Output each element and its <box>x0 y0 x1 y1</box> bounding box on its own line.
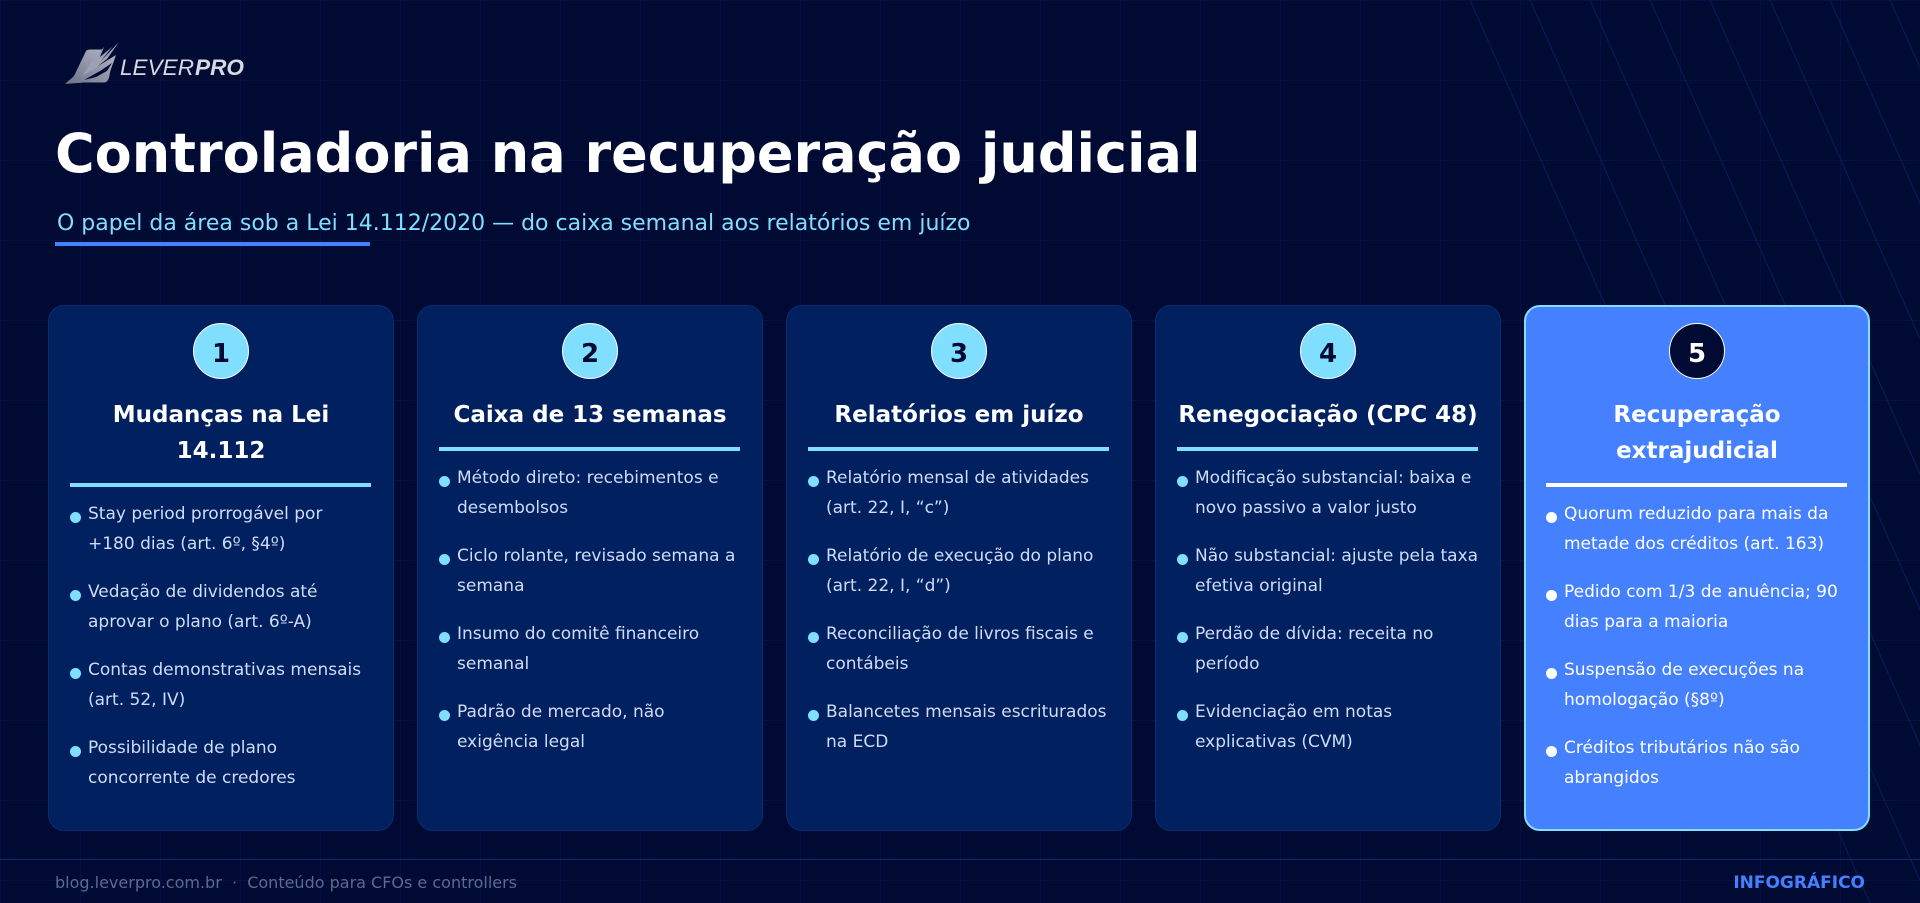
number badge 5: 5 <box>1688 339 1706 369</box>
wordmark: LEVER <box>120 55 194 80</box>
card 5 heading: extrajudicial <box>1616 438 1778 464</box>
bullet 3.3 <box>826 624 1094 674</box>
bullet 2.4: Padrão de mercado, não <box>457 702 665 722</box>
bullet 2.2 <box>457 546 735 596</box>
bullet 1.3: Contas demonstrativas mensais <box>88 660 361 680</box>
bullet 3.1: Relatório mensal de atividades <box>826 468 1089 488</box>
bullet 4.2: efetiva original <box>1195 576 1323 596</box>
number badge 1 <box>193 323 249 379</box>
bullet 5.3 <box>1564 660 1804 710</box>
bullet 2.3 <box>457 624 699 674</box>
bullet 3.4: Balancetes mensais escriturados <box>826 702 1107 722</box>
panel: card 1 <box>48 305 394 831</box>
bullet 5.2: Pedido com 1/3 de anuência; 90 <box>1564 582 1838 602</box>
card 1 heading: Mudanças na Lei <box>113 402 329 428</box>
bullet 3.2: Relatório de execução do plano <box>826 546 1093 566</box>
card 1 heading: 14.112 <box>177 438 265 464</box>
bullet 1.1: Stay period prorrogável por <box>88 504 322 524</box>
card 1 heading <box>113 402 329 464</box>
card 2 heading: Caixa de 13 semanas <box>453 402 727 428</box>
panel: card 5 highlighted <box>1524 305 1870 831</box>
panel: card 2 <box>417 305 763 831</box>
bullet 3.1 <box>826 468 1089 518</box>
bullet 2.2: Ciclo rolante, revisado semana a <box>457 546 735 566</box>
bullet 2.2: semana <box>457 576 524 596</box>
bullet 1.2: aprovar o plano (art. 6º-A) <box>88 612 312 632</box>
bullet 4.4: explicativas (CVM) <box>1195 732 1353 752</box>
bullet 5.4: abrangidos <box>1564 768 1659 788</box>
footer tag: INFOGRÁFICO <box>1733 873 1865 893</box>
bullet 1.2 <box>88 582 318 632</box>
bullet 2.1: desembolsos <box>457 498 568 518</box>
bullet 1.4: concorrente de credores <box>88 768 296 788</box>
bullet 2.3: Insumo do comitê financeiro <box>457 624 699 644</box>
subtitle: O papel da área sob a Lei 14.112/2020 — do caixa semanal aos relatórios em juízo <box>57 211 971 236</box>
bullet 4.2: Não substancial: ajuste pela taxa <box>1195 546 1478 566</box>
number badge 4: 4 <box>1319 339 1337 369</box>
number badge 3 <box>931 323 987 379</box>
number badge 3: 3 <box>950 339 968 369</box>
bullet 4.3: Perdão de dívida: receita no <box>1195 624 1433 644</box>
bullet 3.1: (art. 22, I, “c”) <box>826 498 949 518</box>
bullet 5.1: Quorum reduzido para mais da <box>1564 504 1828 524</box>
bullet 1.2: Vedação de dividendos até <box>88 582 318 602</box>
bullet 5.1: metade dos créditos (art. 163) <box>1564 534 1824 554</box>
number badge 4 <box>1300 323 1356 379</box>
bullet 1.3: (art. 52, IV) <box>88 690 185 710</box>
card 5 heading: Recuperação <box>1613 402 1781 428</box>
icon: logo mark <box>65 42 119 84</box>
bullet 2.1 <box>457 468 719 518</box>
bullet 5.2: dias para a maioria <box>1564 612 1728 632</box>
bullet 1.1: +180 dias (art. 6º, §4º) <box>88 534 285 554</box>
panel: card 3 <box>786 305 1132 831</box>
bullet 4.4 <box>1195 702 1392 752</box>
number badge 1: 1 <box>212 339 230 369</box>
bullet 5.1 <box>1564 504 1828 554</box>
panel: card 4 <box>1155 305 1501 831</box>
bullet 1.4 <box>88 738 296 788</box>
bullet 5.2 <box>1564 582 1838 632</box>
logo: LeverPro: PRO <box>195 55 244 80</box>
bullet 3.4: na ECD <box>826 732 888 752</box>
bullet 2.4: exigência legal <box>457 732 585 752</box>
bullet 2.3: semanal <box>457 654 529 674</box>
bullet 4.2 <box>1195 546 1478 596</box>
bullet 2.4 <box>457 702 665 752</box>
bullet 1.1 <box>88 504 322 554</box>
bullet 5.4: Créditos tributários não são <box>1564 738 1800 758</box>
card 3 heading: Relatórios em juízo <box>834 402 1084 428</box>
subtitle underline <box>55 242 370 246</box>
bullet 4.1: Modificação substancial: baixa e <box>1195 468 1471 488</box>
bullet 3.3: contábeis <box>826 654 908 674</box>
card 4 heading: Renegociação (CPC 48) <box>1178 402 1478 428</box>
number badge 2 <box>562 323 618 379</box>
title: Controladoria na recuperação judicial <box>55 122 1200 185</box>
number badge 2: 2 <box>581 339 599 369</box>
footer source: blog.leverpro.com.br · Conteúdo para CFOs e controllers <box>55 873 517 892</box>
bullet 4.1 <box>1195 468 1471 518</box>
bullet 1.3 <box>88 660 361 710</box>
card 5 heading <box>1613 402 1781 464</box>
bullet 1.4: Possibilidade de plano <box>88 738 277 758</box>
bullet 3.2: (art. 22, I, “d”) <box>826 576 951 596</box>
bullet 2.1: Método direto: recebimentos e <box>457 468 719 488</box>
bullet 5.3: homologação (§8º) <box>1564 690 1725 710</box>
logo: LeverPro <box>65 42 244 84</box>
bullet 3.2 <box>826 546 1093 596</box>
bullet 4.1: novo passivo a valor justo <box>1195 498 1417 518</box>
number badge 5 <box>1669 323 1725 379</box>
bullet 3.3: Reconciliação de livros fiscais e <box>826 624 1094 644</box>
bullet 5.3: Suspensão de execuções na <box>1564 660 1804 680</box>
bullet 4.4: Evidenciação em notas <box>1195 702 1392 722</box>
bullet 4.3 <box>1195 624 1433 674</box>
bullet 3.4 <box>826 702 1107 752</box>
bullet 5.4 <box>1564 738 1800 788</box>
bullet 4.3: período <box>1195 654 1260 674</box>
